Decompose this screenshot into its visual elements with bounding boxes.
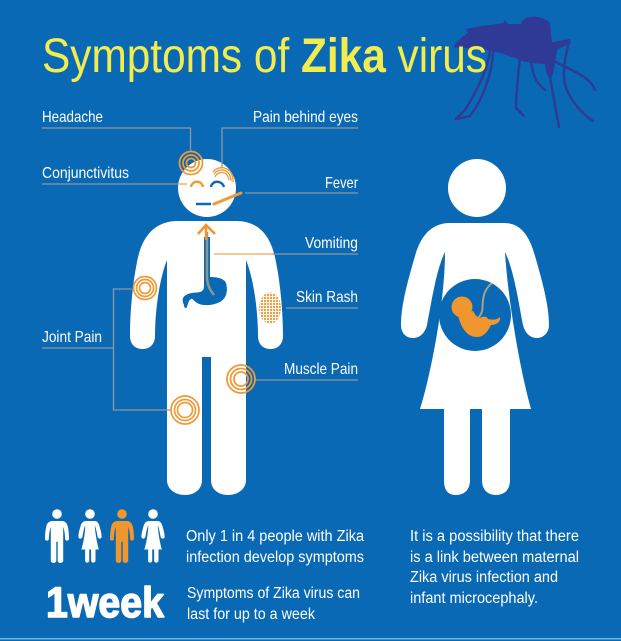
text: microcephaly link: It is a possibility that there (410, 528, 579, 545)
title: Symptoms of Zika virus (42, 30, 487, 83)
text: duration: Symptoms of Zika virus can (187, 585, 360, 602)
woman head (448, 159, 506, 217)
text: only 1 in 4: infection develop symptoms (186, 549, 364, 566)
text: microcephaly link: Zika virus infection and (410, 569, 558, 586)
person orange (110, 509, 134, 563)
symptom labels: Fever (325, 175, 359, 192)
symptom labels (42, 109, 359, 378)
symptom labels: Conjunctivitus (42, 165, 129, 182)
text: only 1 in 4 (186, 528, 364, 566)
womb circle (439, 279, 511, 351)
esophagus tube (207, 232, 214, 295)
text: only 1 in 4: Only 1 in 4 people with Zika (186, 528, 364, 545)
arrow: vomiting direction (198, 225, 215, 240)
people icons: 1 in 4 (45, 509, 165, 563)
text: microcephaly link: infant microcephaly. (410, 590, 538, 607)
symptom labels: Muscle Pain (284, 361, 358, 378)
thermometer (214, 193, 241, 204)
headache rings (180, 152, 202, 174)
umbilical cord (478, 283, 492, 318)
joint rings knee (171, 396, 199, 424)
person woman (78, 509, 102, 563)
man head (178, 159, 236, 217)
pain behind eyes arcs (213, 168, 233, 182)
one week: 1week (46, 579, 164, 627)
symptom labels: Vomiting (305, 235, 358, 252)
symptom leader lines (42, 128, 358, 410)
man body (130, 221, 283, 495)
person man (45, 509, 69, 563)
symptom labels: Skin Rash (296, 289, 358, 306)
icon: mosquito (453, 17, 595, 127)
symptom labels: Joint Pain (42, 329, 102, 346)
conjunctivitis inner line (178, 183, 187, 185)
joint rings arm (134, 276, 156, 300)
eye right (211, 182, 224, 187)
stomach (183, 237, 227, 308)
symptom labels: Headache (42, 109, 103, 126)
fetus (452, 296, 500, 337)
mouth (196, 203, 211, 205)
text: microcephaly link (410, 528, 579, 607)
figure: pregnant woman (401, 159, 549, 495)
skin rash (259, 292, 281, 324)
symptom labels: Pain behind eyes (253, 109, 358, 126)
eye left (191, 182, 203, 187)
woman body (401, 223, 549, 495)
vomiting inner line (214, 253, 272, 255)
text: microcephaly link: is a link between maternal (410, 549, 579, 566)
text: duration (187, 585, 360, 623)
person woman 2 (141, 509, 165, 563)
text: duration: last for up to a week (187, 606, 315, 623)
figure: man with symptoms (42, 128, 358, 495)
muscle rings (227, 365, 255, 393)
